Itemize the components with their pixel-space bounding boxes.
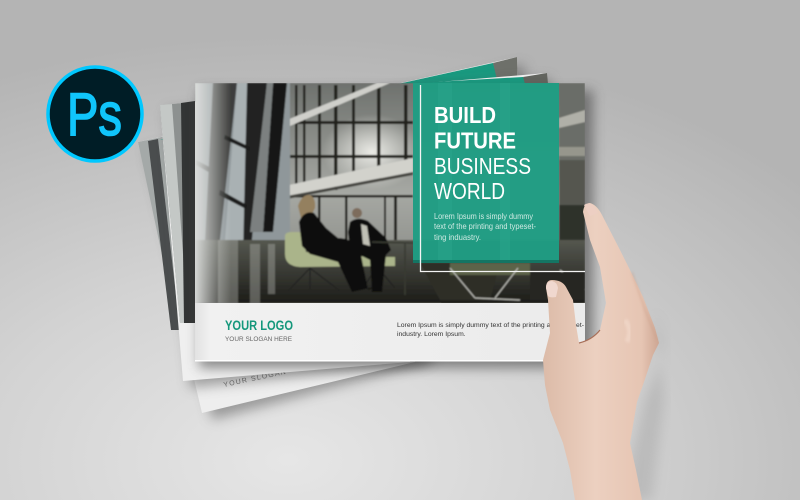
lounge chair — [285, 232, 395, 267]
glass grid — [287, 85, 413, 255]
left window wall — [195, 83, 290, 240]
icon: Photoshop badge: Ps — [67, 81, 122, 148]
panel body text: text of the printing and typeset- — [434, 221, 536, 231]
teal title panel — [413, 83, 585, 272]
right of teal panel — [559, 90, 585, 161]
band description text: industry. Lorem Ipsum. — [397, 331, 466, 338]
headline: BUSINESS — [434, 153, 531, 179]
lower right furniture behind panel — [420, 263, 500, 300]
icon: Photoshop badge — [48, 67, 142, 161]
panel body text — [434, 211, 536, 242]
balcony band — [280, 158, 413, 196]
slogan text: YOUR SLOGAN HERE — [225, 336, 292, 343]
headline: FUTURE — [434, 128, 516, 154]
band description text — [397, 322, 584, 338]
floor — [195, 240, 585, 303]
headline — [434, 102, 531, 204]
headline: BUILD — [434, 102, 496, 128]
hand holding the brochure — [543, 203, 664, 500]
back brochure page: third sheet — [138, 57, 540, 420]
knuckle and finger creases — [632, 272, 657, 340]
rotated slogan on third sheet: YOUR SLOGAN — [223, 369, 288, 389]
headline: WORLD — [434, 178, 505, 204]
fingernails — [546, 281, 558, 297]
seated woman — [298, 195, 378, 292]
back brochure page: second sheet — [160, 73, 560, 388]
bottom white band — [195, 303, 585, 361]
side table — [372, 242, 413, 295]
panel body text: Lorem Ipsum is simply dummy — [434, 211, 534, 221]
panel body text: ting induastry. — [434, 232, 481, 242]
cover photo: office lobby — [195, 83, 585, 303]
white frame lines — [420, 85, 585, 272]
main brochure shadow — [199, 90, 593, 368]
seated man — [348, 208, 391, 292]
main brochure page — [195, 83, 585, 362]
logo text: YOUR LOGO — [225, 318, 293, 333]
band description text: Lorem Ipsum is simply dummy text of the printing and typeset- — [397, 322, 584, 329]
upper diagonal beam — [287, 83, 390, 126]
